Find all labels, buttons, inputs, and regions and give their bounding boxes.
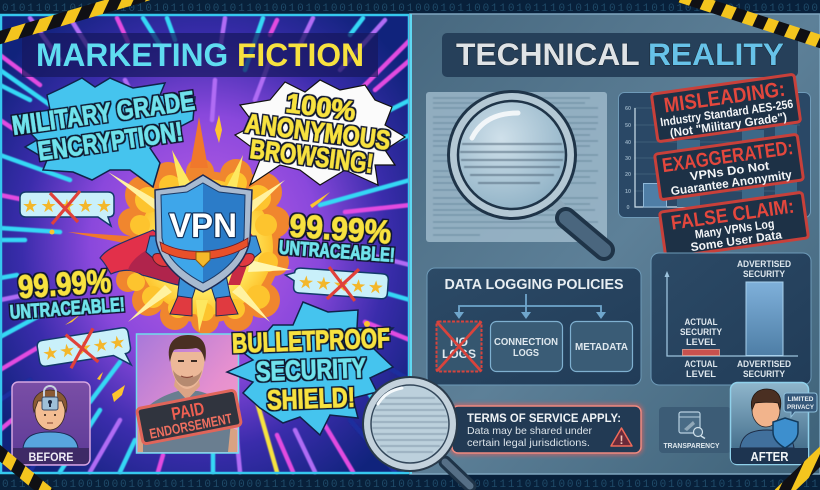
box: no logs: LOGS [442,347,476,361]
callout: terms of service: TERMS OF SERVICE APPLY: [467,411,621,425]
box: metadata [570,322,632,372]
bar: actual [682,350,720,356]
stamp: misleading [651,74,801,142]
bubble: limited privacy: PRIVACY [787,404,815,411]
card: after [730,382,817,464]
panel: data logging policies [427,268,641,385]
icon: warning triangle [611,428,632,447]
burst: bulletproof security shield: SECURITY [255,352,367,387]
hero: VPN shield superhero [100,175,261,316]
callout: terms of service [452,406,641,453]
chart: bars behind stamps: 20 [625,172,631,178]
panel: actual vs advertised security chart [651,253,811,385]
burst: bulletproof security shield [227,302,393,435]
stamp: false claim: Many VPNs Log [694,216,775,241]
bar: advertised [746,282,783,356]
panel: actual vs advertised security chart: ACTUAL [684,359,718,369]
stamp: exaggerated: Guarantee Anonymity [670,167,793,198]
claim: 99.99% untraceable left: 99.99% [17,263,112,305]
panel: actual vs advertised security chart: LEVEL [686,337,717,347]
flow arrows [454,294,606,319]
box: connection logs: LOGS [513,347,539,359]
chart: bars behind stamps: 60 [625,106,631,112]
callout: terms of service: Data may be shared under [467,425,593,437]
panel: actual vs advertised security chart: SECURITY [680,327,722,337]
panel: data logging policies: DATA LOGGING POLICIES [444,277,624,293]
panel: actual vs advertised security chart: SECURITY [743,369,785,379]
callout: terms of service: certain legal jurisdictions. [467,437,590,449]
review bubble 1: ★★★★★ [22,196,112,217]
stamp: false claim [659,192,809,258]
bubble: limited privacy [784,393,817,417]
title: marketing fiction: MARKETING FICTION [36,37,364,73]
caution tape bottom right [780,452,820,490]
stamp: misleading: (Not "Military Grade") [669,110,788,140]
stamp: exaggerated: EXAGGERATED: [661,137,794,177]
review bubble 3 [36,323,133,379]
burst: 100% anonymous browsing: ANONYMOUS [243,108,392,156]
cape [100,230,185,285]
magnifier over document [447,90,604,250]
paid endorsement stamp: ENDORSEMENT [148,410,234,442]
photo: paid endorsement [136,334,242,453]
caution tape top left [0,0,148,39]
burst: military grade encryption [10,78,201,187]
panel: marketing fiction [0,14,410,474]
arms [146,236,170,264]
document with fine print [426,92,607,242]
panel: technical reality [410,14,820,474]
burst: military grade encryption: MILITARY GRADE [10,85,197,141]
claim: 99.99% untraceable left [7,262,125,324]
stamp: false claim: FALSE CLAIM: [670,196,796,235]
card: after: AFTER [750,449,789,464]
paid endorsement stamp [136,390,242,444]
panel: actual vs advertised security chart: ADVERTISED [737,259,791,269]
panel: transparency [659,407,731,453]
panel: actual vs advertised security chart: ADVERTISED [737,359,791,369]
chart: bars behind stamps: 50 [625,123,631,129]
speed rays [0,18,410,472]
lock icon [42,386,58,410]
magnifier bottom centre [362,376,470,486]
caution tape top right [680,0,820,43]
explosion behind hero [50,115,370,402]
burst: 100% anonymous browsing: BROWSING! [248,134,375,179]
burst: bulletproof security shield: SHIELD! [266,382,356,416]
panel: actual vs advertised security chart: SECURITY [743,269,785,279]
chart: bars behind stamps: 30 [625,156,631,162]
box: connection logs: CONNECTION [494,336,558,348]
review bubble 2 [284,264,389,303]
icon: warning triangle: ! [620,433,624,447]
box: no logs [436,322,482,372]
card: before [12,382,90,465]
stamp: misleading: MISLEADING: [663,78,787,117]
title band left [22,33,378,77]
stamp: false claim: Some User Data [690,227,783,254]
eyes [178,360,197,362]
chart: bars behind stamps: 0 [626,205,630,211]
chart: bars behind stamps: 10 [625,189,631,195]
box: no logs: NO [450,335,468,349]
VPN label: VPN [169,207,237,245]
review bubble 1 [20,191,114,226]
burst: 100% anonymous browsing: 100% [284,88,357,126]
stamp: misleading: Industry Standard AES-256 [659,97,794,129]
review bubble 2: ★★★★★ [297,272,384,299]
shield body [155,175,252,292]
claim: 99.99% untraceable right: 99.99% [288,208,393,251]
paid endorsement stamp: PAID [170,398,206,424]
belt [160,238,248,260]
box: metadata: METADATA [575,341,628,353]
panel: actual vs advertised security chart: ACTUAL [684,317,718,327]
title: technical reality: TECHNICAL REALITY [456,36,784,72]
chart: bars behind stamps [618,92,810,218]
box: connection logs [490,322,562,372]
panel: transparency: TRANSPARENCY [664,441,720,450]
shield icon [773,418,798,448]
title band right [442,33,798,77]
chart: bars behind stamps: 40 [625,140,631,146]
claim: 99.99% untraceable right: UNTRACEABLE! [278,238,395,267]
review bubble 3: ★★★★★ [41,332,127,365]
stamp: exaggerated [654,134,804,200]
man torso [143,391,232,452]
panel: actual vs advertised security chart: LEVEL [686,369,717,379]
claim: 99.99% untraceable right [278,207,398,267]
burst: 100% anonymous browsing [235,80,405,185]
man arms [138,425,237,452]
legs [177,275,197,302]
caution tape bottom left [0,449,50,490]
bubble: limited privacy: LIMITED [788,396,814,403]
burst: bulletproof security shield: BULLETPROOF [231,322,390,359]
binary strip top: 0101101101010010101011010010110100101010010100101000101100110101110101010101101010101101010101100 [2,3,818,15]
buckle [196,252,210,267]
card: before: BEFORE [28,452,74,464]
burst: military grade encryption: ENCRYPTION! [36,116,185,166]
stamp: exaggerated: VPNs Do Not [689,158,770,183]
icon: browser and magnifier [679,412,705,438]
claim: 99.99% untraceable left: UNTRACEABLE! [9,295,125,324]
